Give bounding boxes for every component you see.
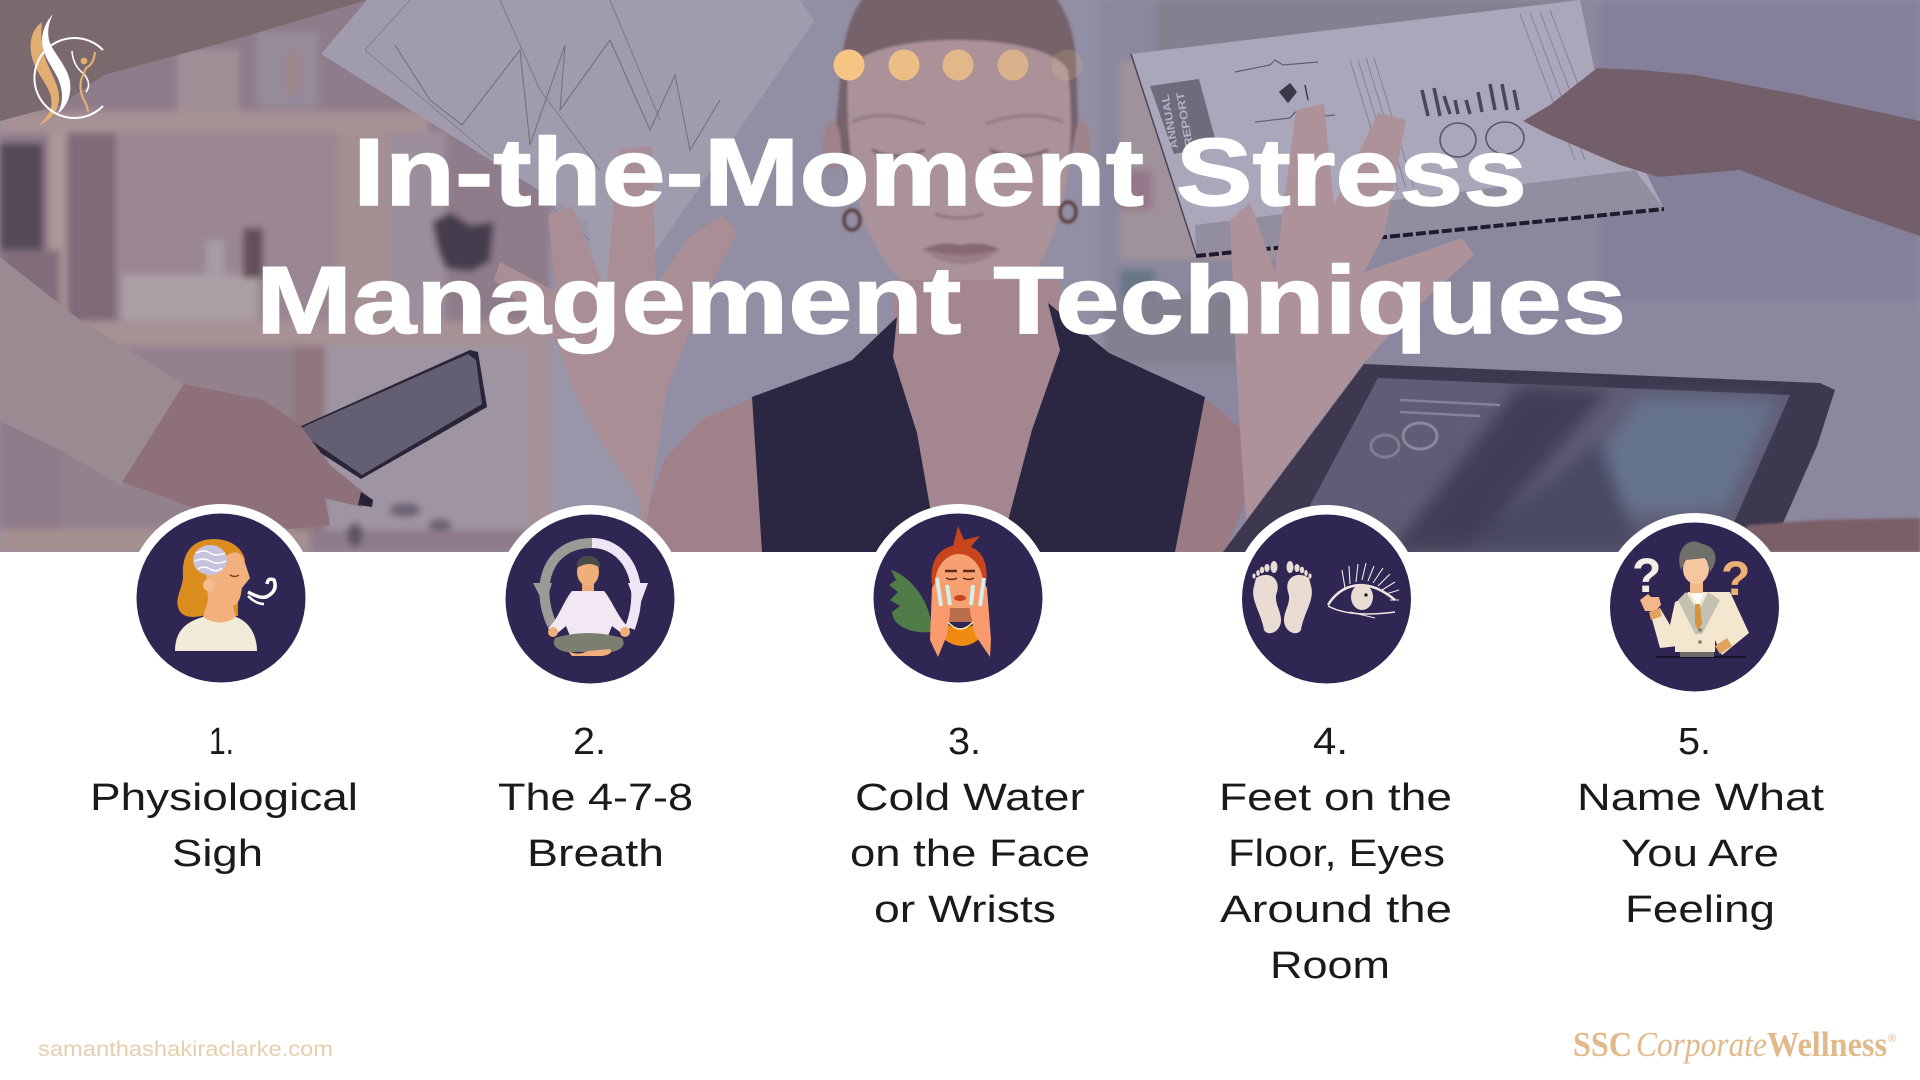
left paper with line chart [321,0,814,251]
technique 4 label: Room [1270,945,1390,987]
footer brand wordmark: ® [1888,1033,1896,1045]
hand passing the report [1523,68,1920,236]
footer brand wordmark: Wellness [1767,1025,1887,1064]
technique 3 label: on the Face [850,833,1090,875]
upper-left sweater sleeve [0,0,367,121]
technique 4 label [1219,721,1452,987]
technique 4 label: 4. [1313,721,1348,763]
technique 3 label: or Wrists [874,889,1056,931]
technique 5 label [1577,721,1825,931]
technique 5 icon: confused man with question marks: ? [1632,550,1661,603]
progress dots [834,50,1082,80]
technique 3 label: Cold Water [855,777,1085,819]
technique 5 label: 5. [1678,721,1711,763]
technique 5 label: Feeling [1625,889,1775,931]
technique 1 icon: woman breathing out [127,504,315,692]
technique 1 label: Sigh [172,833,263,875]
footer brand wordmark: SSC [1573,1025,1632,1064]
lower-left sleeve [0,257,184,486]
technique 4 label: Floor, Eyes [1228,833,1445,875]
technique 3 label: 3. [948,721,981,763]
bottom-right hand [1744,516,1920,552]
technique 2 icon: meditating figure in breath cycle [496,505,684,693]
woman's black sleeveless top [752,303,1205,552]
technique 2 label: 2. [573,721,606,763]
woman's neck and shoulders [638,280,1246,552]
title: In-the-Moment Stress [353,119,1527,226]
technique 5 icon: confused man with question marks [1600,513,1788,701]
technique 4 label: Around the [1220,889,1452,931]
woman's raised hands [494,104,1474,552]
technique 3 icon: cold water on face [864,504,1052,692]
technique 5 label: Name What [1577,777,1825,819]
woman's head [822,0,1090,280]
logo: SSC figure emblem [31,14,103,126]
technique 2 label: Breath [527,833,664,875]
technique 4 icon: feet and eye [1232,505,1420,693]
technique 2 label: The 4-7-8 [498,777,693,819]
technique 5 label: You Are [1621,833,1779,875]
technique 3 label [850,721,1090,931]
right report held up with charts: REPORT [1175,91,1196,148]
title [256,119,1626,354]
technique 4 label: Feet on the [1219,777,1452,819]
footer brand wordmark [1573,1025,1896,1064]
background photo: stressed woman surrounded by papers and devices [0,0,1920,552]
right report held up with charts: ANNUAL [1160,93,1181,150]
footer brand wordmark: Corporate [1636,1025,1767,1064]
title: Management Techniques [256,247,1626,354]
phone in hand [122,350,487,529]
tablet [1223,364,1835,552]
right report held up with charts [1131,0,1664,256]
technique 2 label [498,721,693,875]
technique 1 label: Physiological [90,777,358,819]
technique 1 label [90,721,358,875]
footer website: samanthashakiraclarke.com [38,1038,333,1061]
technique 1 label: 1. [209,721,234,763]
technique 5 icon: confused man with question marks: ? [1721,553,1750,606]
